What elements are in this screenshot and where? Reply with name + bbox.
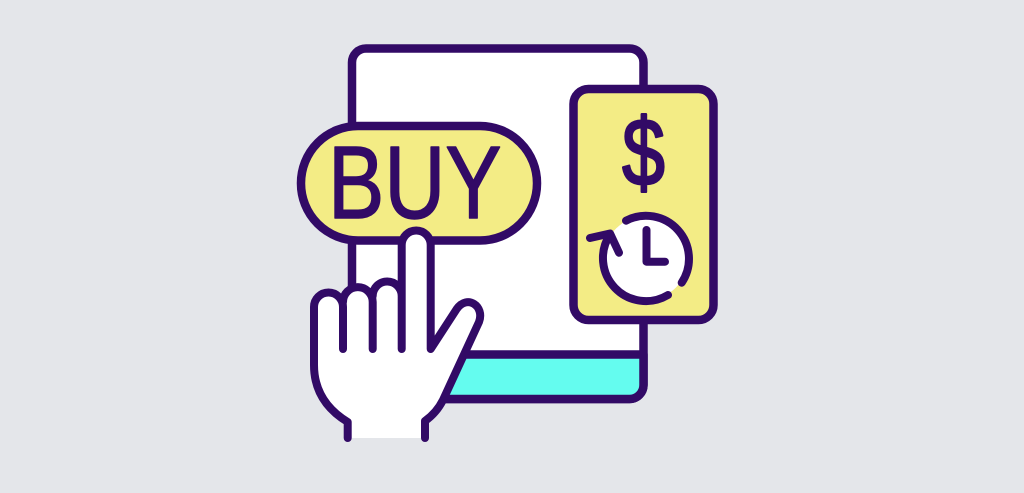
panel: price card [574,89,714,320]
button label: BUY [328,125,502,240]
button: BUY pill [301,125,537,240]
panel: tablet [352,48,644,399]
icon: pointing hand [314,230,480,438]
icon: clock with refresh arrow [590,216,689,301]
icon: dollar sign: $ [622,99,665,206]
